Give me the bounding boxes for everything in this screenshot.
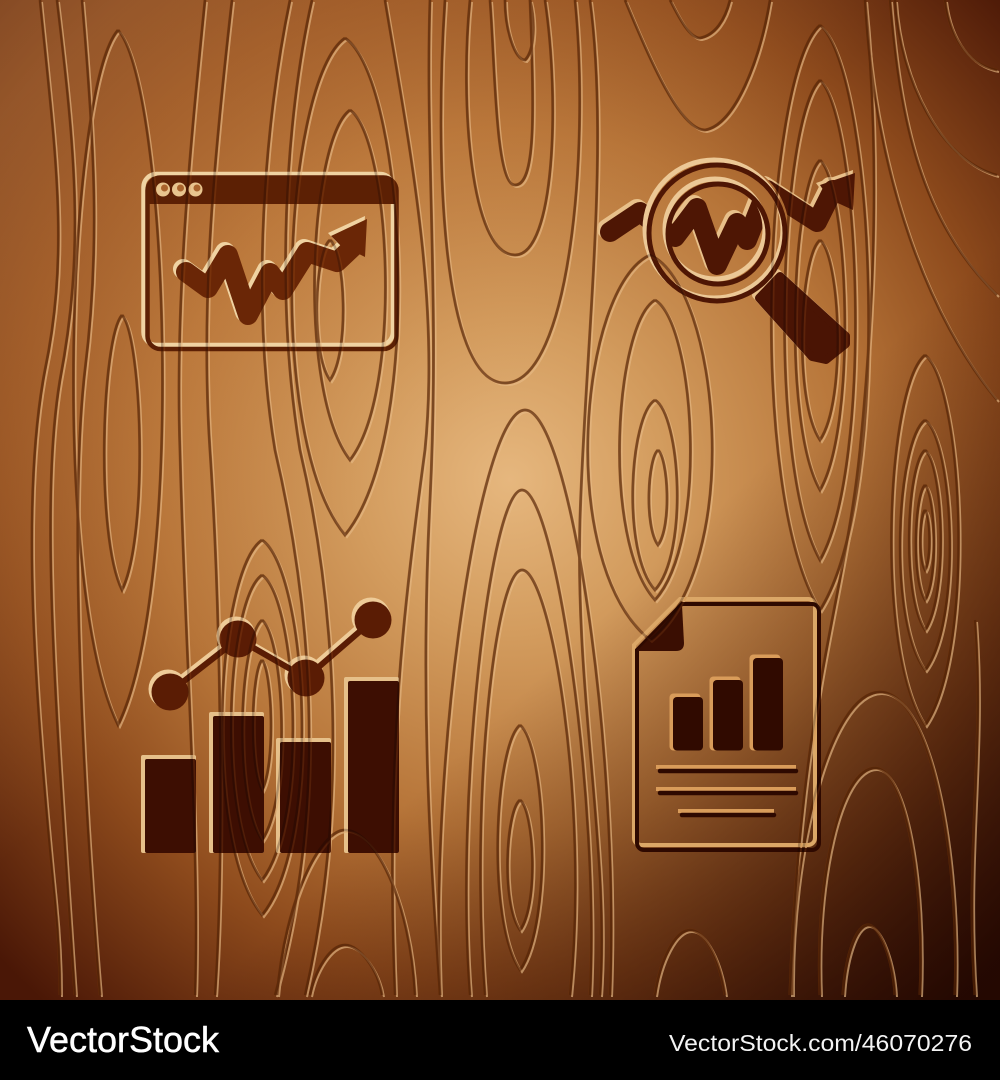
icon: browser window with rising chart: [144, 174, 397, 349]
icon: bar chart with trend line: [141, 598, 399, 853]
icon: magnifying glass over rising chart: [607, 160, 855, 360]
watermark bar: [0, 1000, 1000, 1080]
icon: report document with bars: [634, 599, 819, 850]
brand name: VectorStock: [27, 1019, 220, 1060]
image URL: VectorStock.com/46070276: [669, 1030, 972, 1056]
